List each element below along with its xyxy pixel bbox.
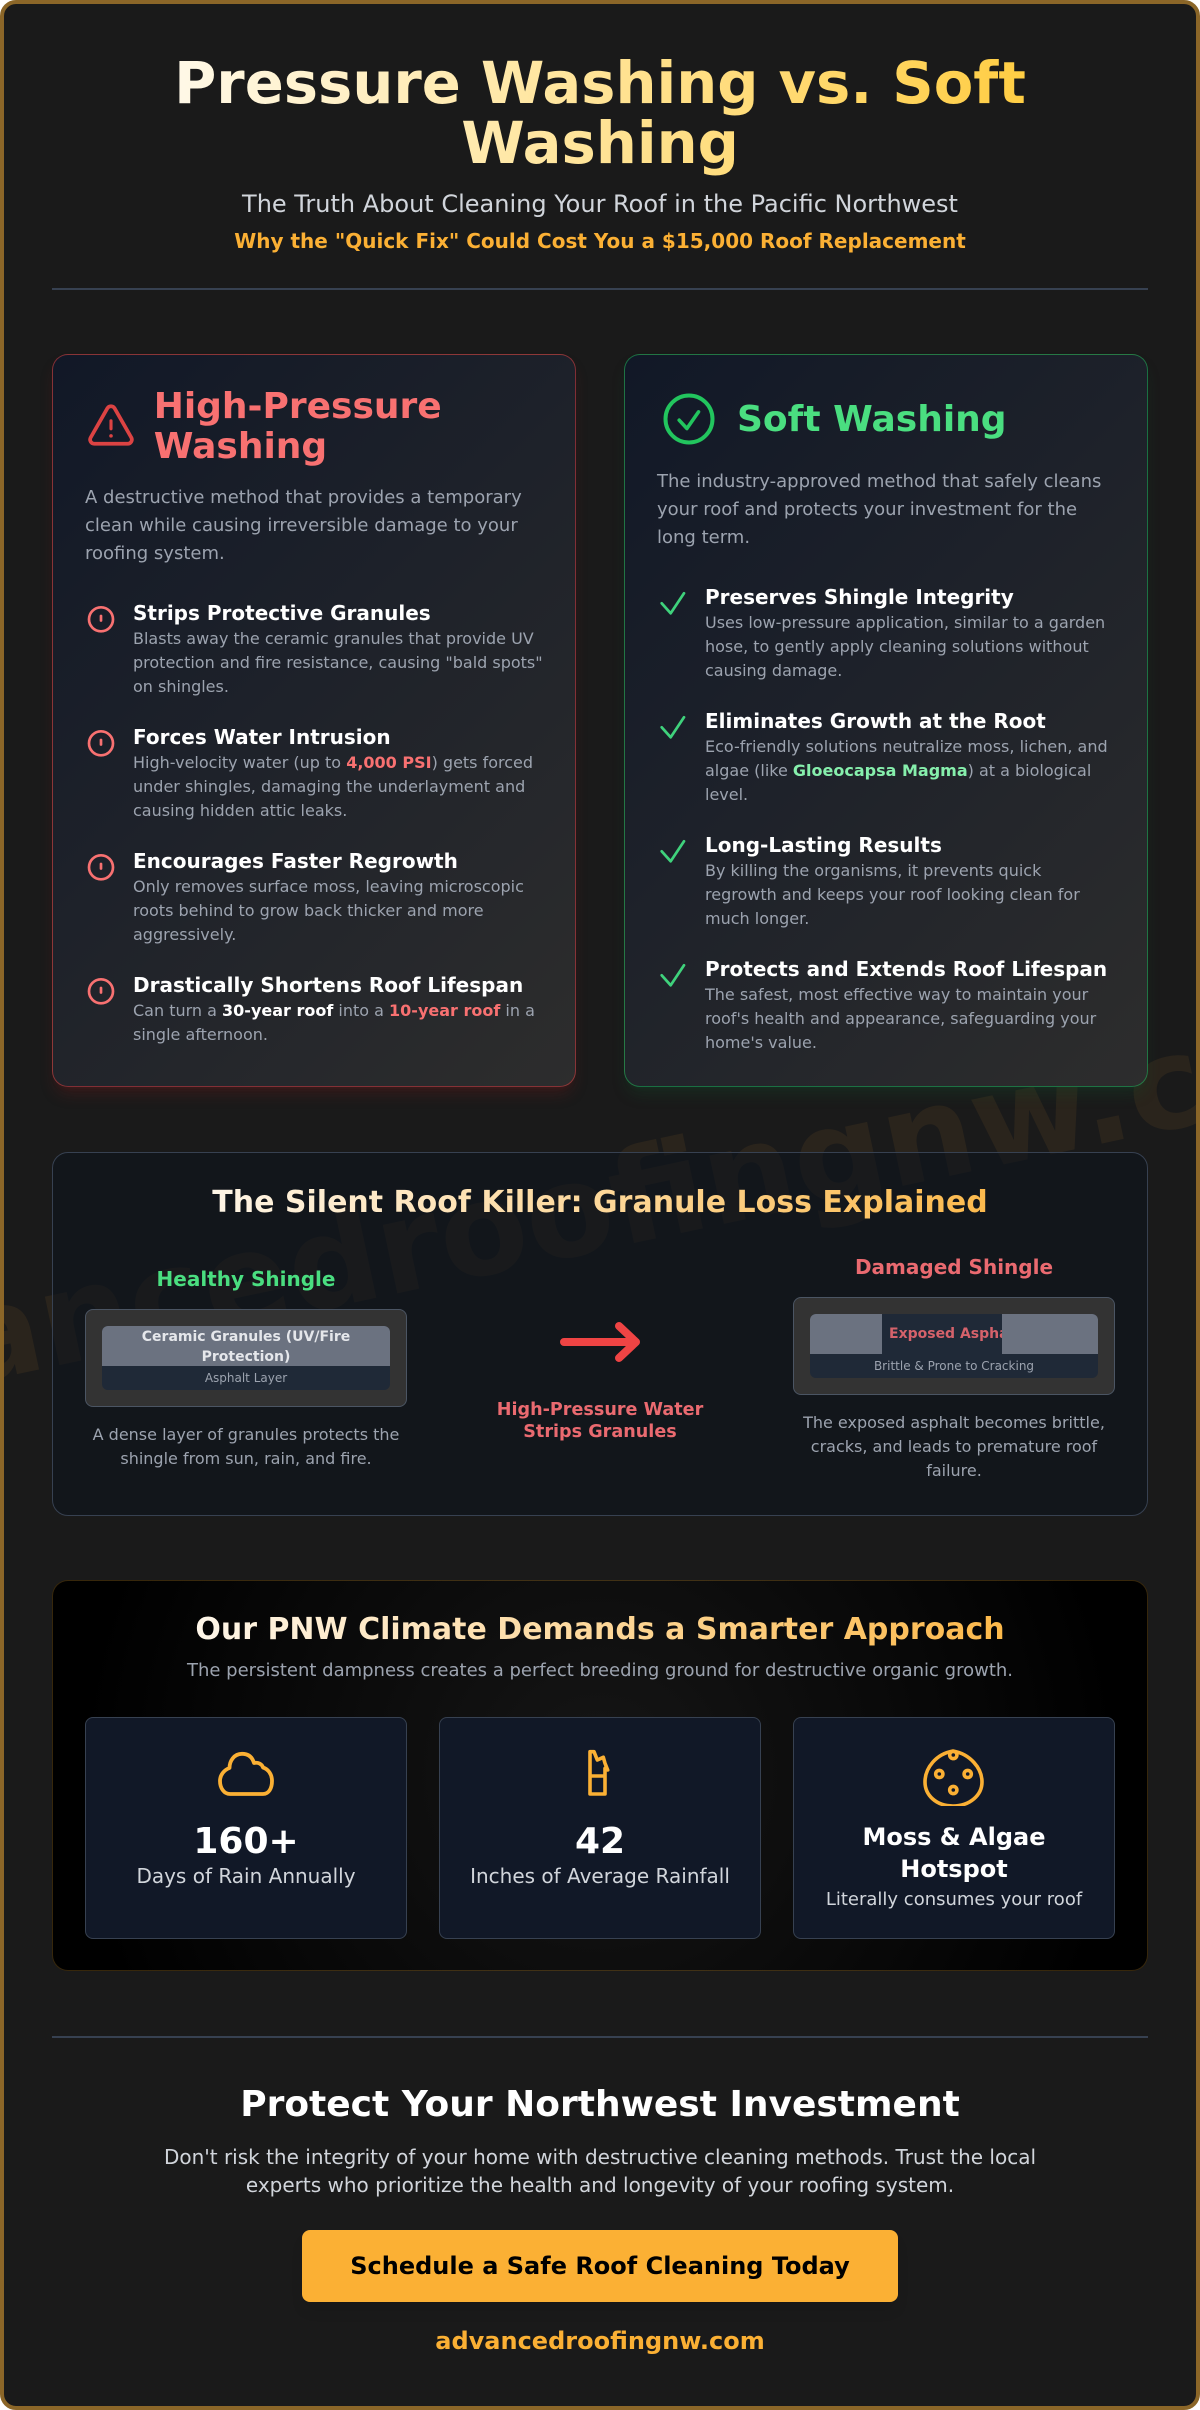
item: forces water intrusion: causing hidden attic leaks. <box>133 800 347 820</box>
item: eliminates growth at the root <box>660 709 1108 804</box>
icon: cloud <box>218 1752 274 1796</box>
caption: healthy: A dense layer of granules protects the <box>93 1425 399 1444</box>
shingle diagram: healthy <box>85 1309 407 1407</box>
caption: damaged: cracks, and leads to premature roof <box>811 1437 1097 1456</box>
caption: damaged <box>803 1413 1105 1480</box>
label: high-pressure water <box>497 1400 704 1442</box>
panel: PNW climate <box>52 1580 1148 1971</box>
intro text: roofing system. <box>85 543 225 564</box>
item: encourages faster regrowth: roots behind to grow back thicker and more <box>133 900 484 920</box>
subtitle: The Truth About Cleaning Your Roof in the Pacific Northwest <box>242 190 958 218</box>
icon: rain gauge <box>588 1750 610 1796</box>
header <box>174 50 1026 253</box>
heading: soft washing: Soft Washing <box>737 398 1007 440</box>
heading: healthy shingle: Healthy Shingle <box>157 1267 335 1291</box>
CTA text <box>164 2145 1036 2197</box>
intro text: A destructive method that provides a temporary <box>85 487 522 508</box>
intro text <box>656 471 1101 548</box>
healthy shingle <box>85 1267 407 1468</box>
number: 42: 42 <box>575 1820 625 1862</box>
label: inches of rainfall: Inches of Average Rainfall <box>470 1864 730 1888</box>
item: strips protective granules: Strips Protective Granules <box>133 601 431 625</box>
panel: granule loss <box>52 1152 1148 1516</box>
heading: high-pressure washing: High-Pressure <box>154 386 442 427</box>
item: eliminates growth at the root: Eliminates Growth at the Root <box>705 709 1046 733</box>
heading: protect investment: Protect Your Northwest Investment <box>240 2084 960 2125</box>
icon: moss spore <box>923 1749 984 1806</box>
stat card: inches of rainfall <box>439 1717 761 1939</box>
heading: climate: Our PNW Climate Demands a Smarter Approach <box>195 1612 1005 1647</box>
CTA text: experts who prioritize the health and longevity of your roofing system. <box>246 2173 954 2197</box>
button <box>302 2230 898 2302</box>
intro text: The industry-approved method that safely cleans <box>657 471 1101 492</box>
item: protects and extends roof lifespan: roof's health and appearance, safeguarding your <box>705 1008 1096 1028</box>
intro text: clean while causing irreversible damage to your <box>85 515 518 536</box>
heading: moss and algae <box>862 1823 1046 1883</box>
item: protects and extends roof lifespan <box>660 957 1107 1052</box>
item: drastically shortens roof lifespan: Drastically Shortens Roof Lifespan <box>133 973 523 997</box>
intro text: your roof and protects your investment for the <box>657 499 1077 520</box>
heading: damaged shingle: Damaged Shingle <box>855 1255 1053 1279</box>
tagline: Why the "Quick Fix" Could Cost You a $15,000 Roof Replacement <box>234 229 966 253</box>
item: protects and extends roof lifespan: Protects and Extends Roof Lifespan <box>705 957 1107 981</box>
item: eliminates growth at the root: level. <box>705 784 748 804</box>
asphalt layer: Asphalt Layer <box>205 1371 287 1385</box>
item: preserves shingle integrity <box>660 585 1105 680</box>
icon: check circle <box>664 394 714 444</box>
item: strips protective granules: protection and fire resistance, causing "bald spots" <box>133 652 543 672</box>
item: long-lasting results <box>660 833 1080 928</box>
remaining granules right <box>1002 1314 1098 1354</box>
panel: soft washing <box>624 354 1148 1087</box>
item: long-lasting results: much longer. <box>705 908 809 928</box>
item: preserves shingle integrity: causing damage. <box>705 660 842 680</box>
website link: advancedroofingnw.com <box>435 2327 765 2355</box>
title <box>52 54 1148 176</box>
brittle asphalt layer: Brittle & Prone to Cracking <box>874 1359 1034 1373</box>
intro text <box>85 487 522 564</box>
item: encourages faster regrowth: Only removes surface moss, leaving microscopic <box>133 876 524 896</box>
CTA text: Don't risk the integrity of your home with destructive cleaning methods. Trust the local <box>164 2145 1036 2169</box>
label: days of rain: Days of Rain Annually <box>136 1864 356 1888</box>
item: drastically shortens roof lifespan <box>88 973 535 1044</box>
label: consumes roof: Literally consumes your roof <box>826 1889 1082 1910</box>
item: encourages faster regrowth: Encourages Faster Regrowth <box>133 849 458 873</box>
heading: granule loss <box>85 1183 1115 1223</box>
item: protects and extends roof lifespan: The safest, most effective way to maintain your <box>705 984 1088 1004</box>
caption: damaged: failure. <box>926 1461 982 1480</box>
item: encourages faster regrowth <box>88 849 524 944</box>
item: long-lasting results: Long-Lasting Results <box>705 833 942 857</box>
heading: high-pressure washing <box>154 386 442 467</box>
item: drastically shortens roof lifespan: Can turn a 30-year roof into a 10-year roof in a <box>133 1000 535 1020</box>
caption: healthy <box>92 1425 399 1468</box>
remaining granules left <box>810 1314 882 1354</box>
title: Pressure Washing vs. Soft <box>174 50 1026 117</box>
heading: climate <box>85 1610 1115 1650</box>
intro text: long term. <box>657 527 750 548</box>
item: forces water intrusion: under shingles, damaging the underlayment and <box>133 776 525 796</box>
title: Washing <box>461 110 739 177</box>
label: high-pressure water: High-Pressure Water <box>497 1400 703 1420</box>
ceramic granule layer: Protection) <box>202 1349 290 1365</box>
item: preserves shingle integrity: Uses low-pressure application, similar to a garden <box>705 612 1105 632</box>
item: strips protective granules <box>88 601 543 696</box>
item: long-lasting results: By killing the organisms, it prevents quick <box>705 860 1041 880</box>
damaged shingle <box>793 1255 1115 1480</box>
caption: healthy: shingle from sun, rain, and fire. <box>120 1449 372 1468</box>
item: eliminates growth at the root: Eco-friendly solutions neutralize moss, lichen, and <box>705 736 1108 756</box>
call to action <box>164 2084 1036 2355</box>
item: forces water intrusion: Forces Water Intrusion <box>133 725 391 749</box>
item: strips protective granules: Blasts away the ceramic granules that provide UV <box>133 628 534 648</box>
label: high-pressure water: Strips Granules <box>523 1422 677 1442</box>
item: encourages faster regrowth: aggressively. <box>133 924 236 944</box>
item: forces water intrusion: High-velocity water (up to 4,000 PSI) gets forced <box>133 752 533 772</box>
item: eliminates growth at the root: algae (like Gloeocapsa Magma) at a biological <box>705 760 1091 780</box>
button: Schedule a Safe Roof Cleaning Today <box>350 2252 850 2280</box>
ceramic granule layer: Ceramic Granules (UV/Fire <box>142 1329 350 1345</box>
icon: arrow <box>560 1322 640 1362</box>
shingle diagram: damaged <box>793 1297 1115 1395</box>
item: preserves shingle integrity: hose, to gently apply cleaning solutions without <box>705 636 1089 656</box>
icon: warning triangle <box>88 404 134 446</box>
heading: moss and algae: Hotspot <box>900 1855 1008 1883</box>
item: long-lasting results: regrowth and keeps your roof looking clean for <box>705 884 1080 904</box>
number: 160+: 160+ <box>193 1820 299 1862</box>
item: protects and extends roof lifespan: home's value. <box>705 1032 817 1052</box>
item: drastically shortens roof lifespan: single afternoon. <box>133 1024 268 1044</box>
item: preserves shingle integrity: Preserves Shingle Integrity <box>705 585 1014 609</box>
panel: high-pressure washing <box>52 354 576 1087</box>
stat card: moss and algae <box>793 1717 1115 1939</box>
item: strips protective granules: on shingles. <box>133 676 229 696</box>
heading: high-pressure washing: Washing <box>154 426 327 467</box>
exposed asphalt label: Exposed Asphalt <box>889 1326 1020 1342</box>
heading: granule loss: The Silent Roof Killer: Granule Loss Explained <box>212 1185 988 1220</box>
stat card: days of rain <box>85 1717 407 1939</box>
caption: damaged: The exposed asphalt becomes brittle, <box>803 1413 1105 1432</box>
ceramic granule layer <box>102 1326 390 1366</box>
transition arrow and label <box>497 1322 704 1442</box>
heading: moss and algae: Moss & Algae <box>862 1823 1046 1851</box>
climate subtitle: The persistent dampness creates a perfect breeding ground for destructive organic growth. <box>187 1660 1013 1681</box>
item: forces water intrusion <box>88 725 533 820</box>
